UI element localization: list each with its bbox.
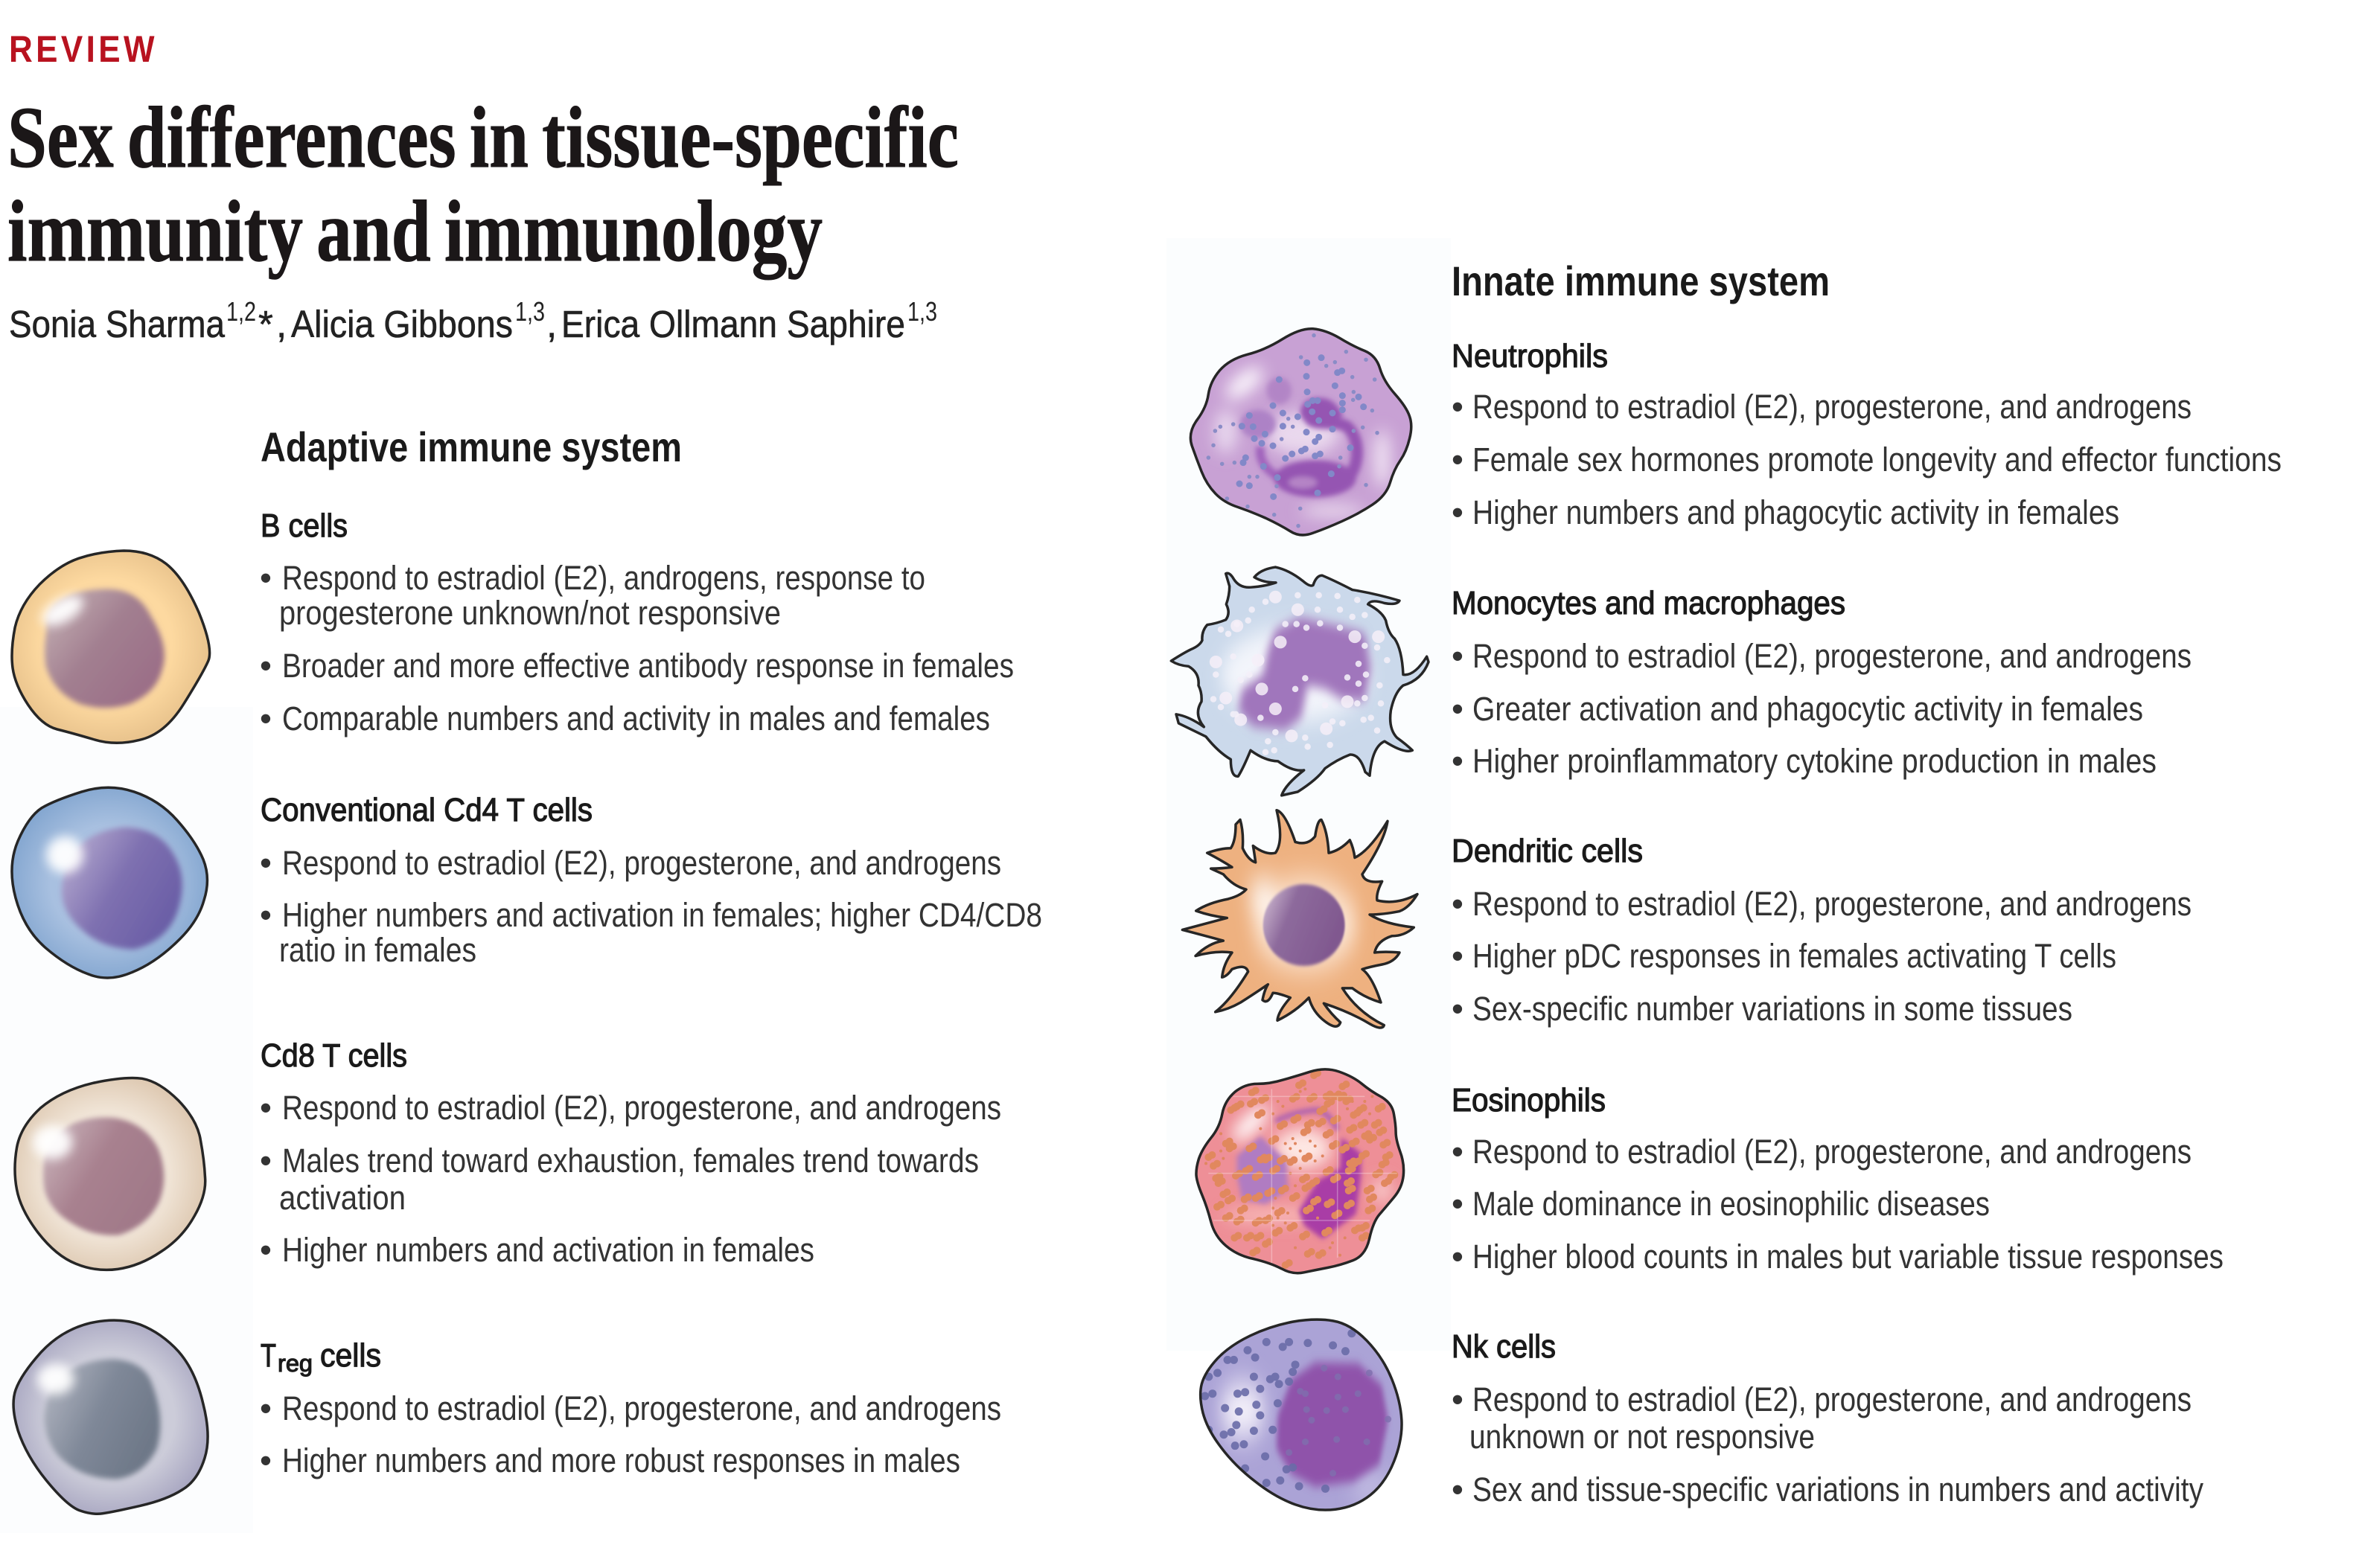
text: monocytes and macrophages: Respond to estradiol (E2), progesterone, and androgens [1472, 637, 2192, 675]
text: eosinophils: • [1452, 1185, 1463, 1223]
text: Treg cells: T [261, 1337, 276, 1374]
text: eosinophils: Male dominance in eosinophilic diseases [1472, 1185, 1990, 1223]
text: NK cells: Respond to estradiol (E2), progesterone, and androgens [1472, 1380, 2192, 1418]
text: CD8 T cells: Cd8 T cells [261, 1037, 407, 1074]
text: CD8 T cells: • [260, 1089, 272, 1127]
authors: 1,3 [515, 296, 545, 327]
text: eosinophils: Higher blood counts in males but variable tissue responses [1472, 1238, 2224, 1276]
text: dendritic cells: • [1452, 885, 1463, 923]
panel: adaptive immune system [12, 423, 1042, 1514]
text: Treg cells: Respond to estradiol (E2), progesterone, and androgens [282, 1389, 1001, 1427]
text: monocytes and macrophages: • [1452, 742, 1463, 780]
text: B cells: B cells [261, 508, 348, 544]
text: CD8 T cells: activation [279, 1179, 406, 1217]
text: NK cells [1452, 1328, 2203, 1508]
heading: innate immune system: Innate immune system [1452, 257, 1830, 304]
title: immunity and immunology [7, 182, 823, 280]
text: B cells [260, 508, 1014, 737]
authors: , [546, 303, 557, 345]
text: B cells: Respond to estradiol (E2), androgens, response to [282, 559, 925, 597]
text: dendritic cells: • [1452, 990, 1463, 1028]
text: Treg cells: • [260, 1389, 272, 1427]
icon: conventional CD4 T cell [12, 787, 207, 978]
icon: Treg cell [13, 1320, 208, 1514]
text: CD8 T cells: Higher numbers and activation in females [282, 1231, 814, 1269]
authors: 1,3 [907, 296, 937, 327]
text: neutrophils: • [1452, 441, 1463, 479]
text: conventional CD4 T cells: ratio in females [279, 931, 476, 969]
authors: Sonia Sharma [9, 303, 226, 345]
text: B cells: • [260, 700, 272, 737]
text: monocytes and macrophages: Higher proinflammatory cytokine production in males [1472, 742, 2157, 780]
icon: dendritic cell [1182, 810, 1417, 1028]
text: conventional CD4 T cells: • [260, 896, 272, 934]
text: Treg cells [260, 1337, 1001, 1479]
icon: eosinophil [1196, 1069, 1404, 1273]
authors: * [258, 303, 273, 345]
authors: Erica Ollmann Saphire [561, 303, 905, 345]
text: B cells: Broader and more effective antibody response in females [282, 647, 1014, 685]
text: dendritic cells: Sex-specific number variations in some tissues [1472, 990, 2072, 1028]
text: Treg cells: Higher numbers and more robust responses in males [282, 1441, 960, 1479]
text: eosinophils: • [1452, 1238, 1463, 1276]
text: neutrophils: Respond to estradiol (E2), progesterone, and androgens [1472, 388, 2192, 426]
authors: 1,2 [226, 296, 256, 327]
authors: Alicia Gibbons [291, 303, 513, 345]
review label: REVIEW [9, 28, 158, 70]
text: Treg cells: cells [320, 1337, 381, 1374]
text: monocytes and macrophages: Monocytes and macrophages [1452, 585, 1845, 621]
text: monocytes and macrophages [1452, 585, 2192, 780]
text: NK cells: Sex and tissue-specific variations in numbers and activity [1472, 1471, 2203, 1508]
text: monocytes and macrophages: Greater activation and phagocytic activity in females [1472, 690, 2143, 728]
text: B cells: • [260, 559, 272, 597]
icon: CD8 T cell [15, 1078, 205, 1270]
panel: innate immune system [1171, 257, 2282, 1510]
text: Treg cells: • [260, 1441, 272, 1479]
text: Treg cells: reg [278, 1350, 313, 1377]
pale backing: adaptive cell column [0, 707, 253, 1533]
authors [9, 296, 937, 345]
text: neutrophils: • [1452, 493, 1463, 531]
icon: monocyte / macrophage [1171, 567, 1429, 796]
text: B cells: Comparable numbers and activity in males and females [282, 700, 990, 737]
text: conventional CD4 T cells: • [260, 844, 272, 882]
text: B cells: progesterone unknown/not responsive [279, 594, 781, 632]
icon: neutrophil [1190, 329, 1411, 535]
text: neutrophils: Higher numbers and phagocytic activity in females [1472, 493, 2119, 531]
pale backing: innate cell column [1166, 238, 1451, 1351]
text: dendritic cells: • [1452, 937, 1463, 975]
text: NK cells: • [1452, 1380, 1463, 1418]
title [7, 89, 959, 280]
text: conventional CD4 T cells [260, 792, 1042, 969]
text: eosinophils: Respond to estradiol (E2), progesterone, and androgens [1472, 1133, 2192, 1171]
text: neutrophils: Neutrophils [1452, 338, 1608, 374]
heading: adaptive immune system: Adaptive immune system [261, 423, 682, 470]
text: monocytes and macrophages: • [1452, 690, 1463, 728]
text: CD8 T cells: • [260, 1231, 272, 1269]
text: CD8 T cells: Males trend toward exhaustion, females trend towards [282, 1142, 979, 1180]
text: monocytes and macrophages: • [1452, 637, 1463, 675]
text: dendritic cells: Higher pDC responses in females activating T cells [1472, 937, 2116, 975]
icon: B cell [12, 551, 210, 743]
text: eosinophils: • [1452, 1133, 1463, 1171]
text: conventional CD4 T cells: Higher numbers and activation in females; higher CD4/CD8 [282, 896, 1042, 934]
text: NK cells: • [1452, 1471, 1463, 1508]
text: neutrophils [1452, 338, 2282, 531]
text: dendritic cells [1452, 833, 2192, 1028]
text: eosinophils [1452, 1082, 2224, 1276]
text: eosinophils: Eosinophils [1452, 1082, 1606, 1119]
text: NK cells: Nk cells [1452, 1328, 1556, 1365]
text: conventional CD4 T cells: Conventional Cd4 T cells [261, 792, 593, 828]
title: Sex differences in tissue-specific [7, 89, 959, 186]
text: dendritic cells: Respond to estradiol (E2), progesterone, and androgens [1472, 885, 2192, 923]
text: dendritic cells: Dendritic cells [1452, 833, 1643, 869]
text: CD8 T cells [260, 1037, 1001, 1269]
text: CD8 T cells: • [260, 1142, 272, 1180]
authors: , [276, 303, 287, 345]
text: conventional CD4 T cells: Respond to estradiol (E2), progesterone, and androgens [282, 844, 1001, 882]
text: B cells: • [260, 647, 272, 685]
icon: NK cell [1201, 1319, 1402, 1510]
text: NK cells: unknown or not responsive [1469, 1418, 1815, 1456]
text: CD8 T cells: Respond to estradiol (E2), progesterone, and androgens [282, 1089, 1001, 1127]
text: neutrophils: • [1452, 388, 1463, 426]
